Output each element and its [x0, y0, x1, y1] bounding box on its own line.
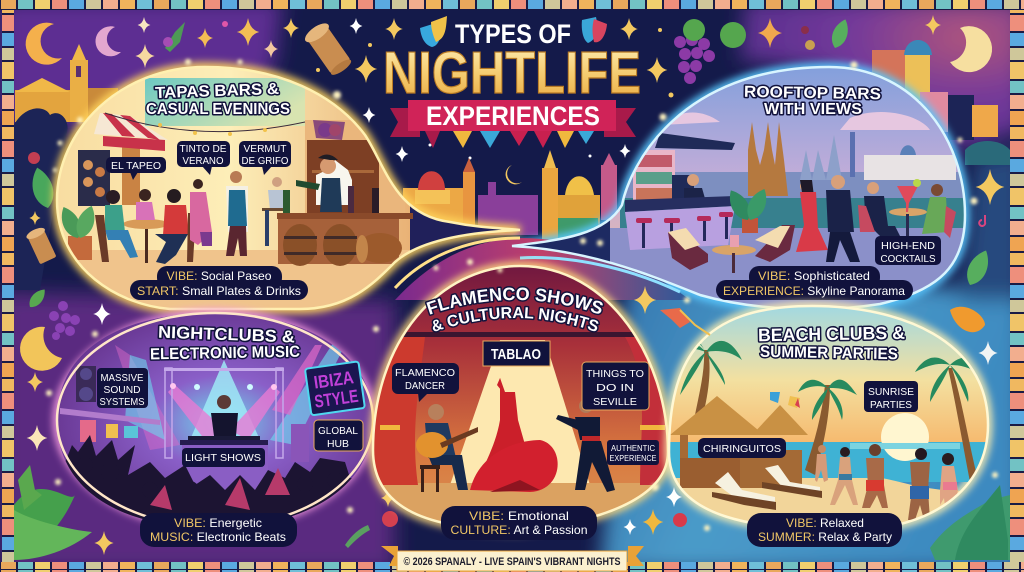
neon sign: ibiza style: STYLE: [313, 386, 360, 412]
DJ stage: [164, 368, 284, 495]
bunting: [770, 392, 780, 403]
skyline view: [625, 122, 963, 198]
callout: tinto de verano: VERANO: [182, 155, 224, 167]
ribbon: experiences: [390, 100, 636, 148]
heading: nightclubs: NIGHTCLUBS &: [158, 323, 295, 346]
sign: tablao: [483, 341, 550, 366]
vibe pill: rooftop: EXPERIENCE: Skyline Panorama: [723, 284, 905, 298]
title: [383, 16, 641, 148]
callout: high-end cocktails: COCKTAILS: [880, 253, 936, 265]
speakers and balcony: [60, 366, 309, 462]
heading: with views: WITH VIEWS: [764, 101, 862, 118]
vibe pill: tapas: START: Small Plates & Drinks: [137, 284, 301, 298]
callout: authentic experience: [607, 440, 659, 465]
vibe pill: rooftop: VIBE: Sophisticated: [758, 269, 870, 283]
panel: beach clubs and summer parties: [665, 302, 995, 547]
vibe pill: nightclubs: VIBE: Energetic: [174, 516, 262, 530]
top centre stars: [283, 18, 674, 162]
guitarist: [416, 404, 478, 492]
table with diners: [95, 189, 196, 264]
callout: light shows: LIGHT SHOWS: [185, 452, 261, 464]
callout: sunrise parties: [864, 381, 918, 412]
panel: tapas bars glow outline: [57, 67, 520, 309]
heading: nightlife: NIGHTLIFE: [383, 40, 641, 106]
panel: tapas bars and casual evenings: [50, 60, 530, 320]
panel: rooftop bars glow outline: [512, 67, 965, 309]
panel outline: [373, 266, 668, 530]
vibe pill: beach: [747, 513, 902, 547]
spotlight on stage: [450, 340, 590, 485]
icon: theatre masks left: [420, 16, 447, 47]
callout: high-end cocktails: [875, 236, 941, 265]
vibe pill: flamenco: [441, 506, 597, 540]
callout: light shows: [182, 448, 265, 467]
callout: things to do in seville: DO IN: [596, 382, 634, 394]
panel: flamenco shows and cultural nights: [363, 256, 671, 540]
icon: theatre masks right: [582, 17, 607, 43]
decoration: bottom left leaves, grapes and moon: [14, 286, 398, 560]
light beams: [115, 344, 342, 450]
crowd: [66, 435, 352, 519]
panel: rooftop bars with views: [505, 60, 970, 318]
callout: el tapeo: EL TAPEO: [111, 160, 161, 172]
panel outline: [512, 67, 965, 309]
decoration: kite, orange slice, stars and leaves on the right: [624, 286, 1010, 560]
callout: global hub: HUB: [327, 438, 349, 450]
vibe pill: flamenco: VIBE: Emotional: [469, 509, 569, 523]
cork left: [25, 226, 57, 265]
sun loungers: [712, 465, 822, 510]
panel: nightclubs and electronic music: [50, 310, 380, 547]
swoosh behind the flamenco arch: [395, 238, 690, 300]
callout: things to do in seville: [582, 362, 649, 410]
bokeh lights along the panel outlines: [46, 59, 998, 531]
top left decoration: moons, stars and city: [14, 17, 278, 290]
callout: massive sound systems: SYSTEMS: [100, 396, 144, 408]
callout: massive sound systems: MASSIVE: [100, 372, 144, 384]
callout: authentic experience: EXPERIENCE: [610, 454, 656, 463]
vibe pill: tapas: [130, 266, 308, 300]
patrons: [190, 171, 286, 256]
callout: global hub: GLOBAL: [318, 425, 358, 437]
callout: authentic experience: AUTHENTIC: [611, 444, 655, 453]
heading: casual evenings: CASUAL EVENINGS: [146, 101, 290, 118]
vibe pill: tapas: VIBE: Social Paseo: [166, 269, 272, 283]
callout: vermut de grifo: [239, 141, 291, 175]
heading: cultural nights: & CULTURAL NIGHTS: [431, 306, 600, 333]
top right decoration: grapes, leaves, moon, city: [674, 15, 1010, 289]
callout: tinto de verano: TINTO DE: [180, 143, 226, 155]
footer ribbon: [381, 546, 644, 571]
palm centre: [798, 380, 857, 475]
curtains: [372, 337, 670, 485]
callout: flamenco dancer: DANCER: [405, 380, 445, 392]
heading: types of: TYPES OF: [455, 19, 571, 49]
callout: chiringuitos: [698, 438, 786, 458]
panel outline: [57, 313, 373, 527]
neon sign: ibiza style: [305, 361, 365, 415]
heading: tapas bars: TAPAS BARS &: [155, 81, 280, 102]
couple and seated guests: [796, 175, 956, 262]
heading: electronic music: ELECTRONIC MUSIC: [150, 344, 301, 363]
callout: el tapeo: [106, 157, 166, 180]
panel outline: [669, 306, 988, 530]
rooftop bar: [625, 133, 735, 250]
callout: high-end cocktails: HIGH-END: [881, 240, 935, 252]
dancers: [815, 444, 958, 520]
terrace lounge: [668, 186, 795, 273]
callout: sunrise parties: SUNRISE: [868, 386, 914, 398]
vibe pill: flamenco: CULTURE: Art & Passion: [450, 523, 588, 537]
callout: global hub: [314, 420, 363, 451]
callout: things to do in seville: THINGS TO: [586, 368, 644, 380]
vibe pill: rooftop: [716, 266, 913, 300]
palm right: [915, 358, 976, 480]
panel outline: [57, 67, 520, 309]
vibe pill: beach: VIBE: Relaxed: [786, 516, 864, 530]
callout: chiringuitos: CHIRINGUITOS: [703, 443, 781, 455]
ribbon: experiences: EXPERIENCES: [426, 101, 600, 131]
vibe pill: beach: SUMMER: Relax & Party: [758, 530, 892, 544]
callout: vermut de grifo: DE GRIFO: [242, 155, 288, 167]
heading: beach clubs: BEACH CLUBS &: [758, 323, 905, 345]
palm left: [680, 340, 742, 414]
flamenco dancer: [470, 378, 558, 492]
callout: vermut de grifo: VERMUT: [244, 143, 287, 155]
footer ribbon: © 2026 SPANALY - LIVE SPAIN'S VIBRANT NIGHTS: [404, 556, 620, 568]
heading: summer parties: SUMMER PARTIES: [760, 344, 898, 363]
beach huts: [670, 396, 808, 488]
callout: massive sound systems: [97, 368, 148, 408]
callout: flamenco dancer: FLAMENCO: [395, 367, 455, 379]
sign: tablao: TABLAO: [491, 346, 541, 363]
heading: flamenco shows: FLAMENCO SHOWS: [424, 286, 604, 316]
male dancer: [556, 399, 615, 492]
vibe pill: nightclubs: MUSIC: Electronic Beats: [150, 530, 286, 544]
heading: rooftop bars: ROOFTOP BARS: [744, 84, 881, 103]
callout: flamenco dancer: [392, 363, 459, 402]
callout: tinto de verano: [177, 141, 230, 175]
vibe pill: nightclubs: [140, 513, 297, 547]
cork top: [302, 20, 355, 79]
neon sign: ibiza style: IBIZA: [313, 367, 355, 393]
callout: things to do in seville: SEVILLE: [593, 396, 637, 408]
centre skyline: [403, 150, 617, 240]
bar counter, barrels and bartender: [277, 154, 413, 266]
callout: sunrise parties: PARTIES: [870, 399, 912, 411]
callout: massive sound systems: SOUND: [104, 384, 141, 396]
